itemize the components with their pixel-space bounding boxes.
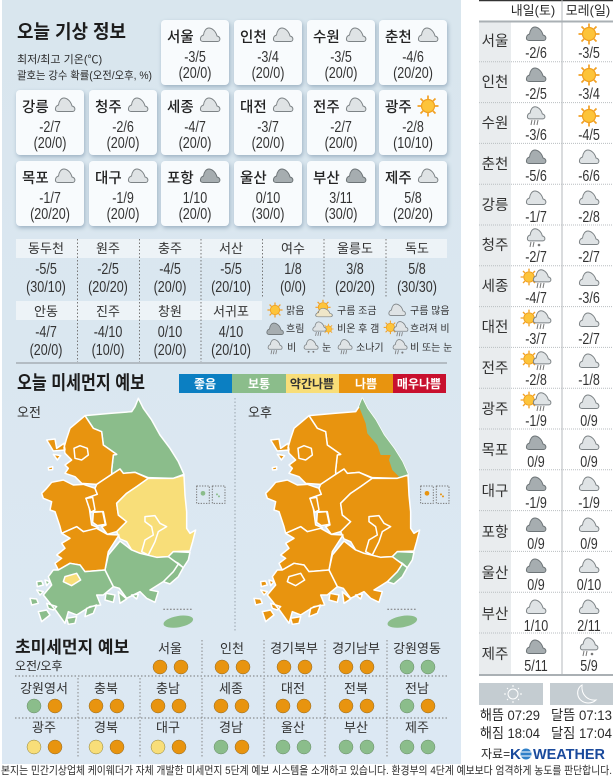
table: other cities: 진주 xyxy=(96,304,120,319)
panel: two-day forecast table: -2/8 xyxy=(525,371,547,388)
card: 대구: 대구 xyxy=(95,170,122,187)
panel: two-day forecast table: -1/9 xyxy=(525,412,547,429)
card: 전주: 전주 xyxy=(313,99,340,116)
table: other cities: 충주 xyxy=(158,241,182,256)
panel: ultrafine dust grid: 강원영서 xyxy=(20,681,68,696)
subtitle notes: 괄호는 강수 확률(오전/오후, %) xyxy=(17,69,152,82)
card: 수원: (20/0) xyxy=(325,64,357,81)
panel: ultrafine dust grid: 경기북부 xyxy=(270,641,318,656)
card: 청주: -2/6 xyxy=(112,118,134,135)
card: 포항 xyxy=(161,161,229,226)
panel: two-day forecast table: -2/7 xyxy=(525,248,547,265)
table: other cities: 동두천 xyxy=(28,241,64,256)
panel: two-day forecast table: 광주 xyxy=(482,401,508,418)
table: other cities: 4/10 xyxy=(219,323,243,340)
panel: ultrafine dust grid: 전남 xyxy=(405,681,429,696)
table: other cities: 5/8 xyxy=(408,260,426,277)
panel: two-day forecast table: -1/9 xyxy=(578,494,600,511)
panel: two-day forecast table: 전주 xyxy=(482,360,508,377)
panel: two-day forecast table: 대전 xyxy=(482,319,508,336)
card: 광주: 광주 xyxy=(385,99,412,116)
panel: two-day forecast table: -3/6 xyxy=(578,289,600,306)
table: other cities: 3/8 xyxy=(346,260,364,277)
panel: two-day forecast table: 5/9 xyxy=(580,657,598,674)
legend: weather icons: 눈 xyxy=(322,342,331,354)
background panel xyxy=(2,0,461,764)
panel: two-day forecast table: 대구 xyxy=(482,483,508,500)
panel: two-day forecast table: -4/5 xyxy=(578,126,600,143)
card: 청주: 청주 xyxy=(95,99,122,116)
panel: ultrafine dust grid: 경북 xyxy=(94,720,118,735)
legend: air quality scale: 보통 xyxy=(248,377,270,391)
table: other cities: (30/10) xyxy=(26,278,66,295)
table: other cities: (20/10) xyxy=(211,341,251,358)
heading: fine dust forecast: 오늘 미세먼지 예보 xyxy=(17,372,145,394)
panel: two-day forecast table: 0/9 xyxy=(580,535,598,552)
source logo: 자료= xyxy=(481,747,510,761)
panel: ultrafine dust grid: 서울 xyxy=(158,641,182,656)
card: 강릉: -2/7 xyxy=(39,118,61,135)
panel: ultrafine dust grid xyxy=(15,640,447,758)
panel: two-day forecast table: 2/11 xyxy=(577,617,601,634)
sunrise and moonrise times: 해짐 18:04 xyxy=(480,725,540,741)
panel: ultrafine dust grid: 대구 xyxy=(156,720,180,735)
panel: two-day forecast table: 인천 xyxy=(482,74,508,91)
card: 세종: 세종 xyxy=(167,99,194,116)
table: other cities: -4/10 xyxy=(94,323,122,340)
card: 세종: (20/0) xyxy=(179,134,211,151)
table: other cities: 안동 xyxy=(34,304,58,319)
panel: ultrafine dust grid: 충북 xyxy=(94,681,118,696)
legend: air quality scale: 좋음 xyxy=(194,377,216,391)
panel: ultrafine dust grid: 강원영동 xyxy=(393,641,441,656)
card: 강릉 xyxy=(16,90,84,155)
panel: two-day forecast table: -1/8 xyxy=(578,371,600,388)
panel: two-day forecast table: -5/6 xyxy=(525,167,547,184)
source logo: K xyxy=(510,746,521,763)
legend: weather icons: 맑음 xyxy=(286,305,304,317)
card: 제주: 제주 xyxy=(385,170,412,187)
subtitle notes xyxy=(17,53,152,82)
card: 인천: (20/0) xyxy=(252,64,284,81)
table: other cities: -5/5 xyxy=(35,260,57,277)
card: 서울 xyxy=(161,20,229,85)
legend: weather icons: 비 xyxy=(287,342,296,354)
table: other cities: -2/5 xyxy=(97,260,119,277)
sunrise and moonrise times: 해뜸 07:29 xyxy=(480,707,540,723)
card: 포항: 1/10 xyxy=(183,189,207,206)
panel: two-day forecast table: -2/5 xyxy=(525,85,547,102)
legend: weather icons: 구름 조금 xyxy=(337,305,377,317)
legend: air quality scale xyxy=(179,374,446,393)
card: 제주: (20/20) xyxy=(393,205,433,222)
table: other cities: -4/7 xyxy=(35,323,57,340)
card: 청주: (20/0) xyxy=(107,134,139,151)
panel: ultrafine dust grid: 경기남부 xyxy=(332,641,380,656)
card: 목포: -1/7 xyxy=(39,189,61,206)
table: other cities: 0/10 xyxy=(158,323,182,340)
panel: two-day forecast table: 모레(일) xyxy=(566,3,610,18)
card: 울산: 0/10 xyxy=(256,189,280,206)
panel: ultrafine dust grid: 세종 xyxy=(219,681,243,696)
table: other cities: 서산 xyxy=(219,241,243,256)
card: 부산: 부산 xyxy=(313,170,340,187)
panel: two-day forecast table: 0/9 xyxy=(527,453,545,470)
panel: ultrafine dust grid: 부산 xyxy=(344,720,368,735)
panel: two-day forecast table: -1/7 xyxy=(525,208,547,225)
subtitle: morning/afternoon: 오전/오후 xyxy=(15,659,62,673)
card: 울산 xyxy=(234,161,302,226)
table: other cities: -4/5 xyxy=(159,260,181,277)
label: morning: 오전 xyxy=(17,405,41,420)
card: 광주 xyxy=(379,90,447,155)
card: 포항: 포항 xyxy=(167,170,194,187)
panel: ultrafine dust grid: 인천 xyxy=(220,641,244,656)
heading: ultrafine dust forecast: 초미세먼지 예보 xyxy=(15,638,129,657)
table: other cities: -5/5 xyxy=(220,260,242,277)
panel: ultrafine dust grid: 광주 xyxy=(32,720,56,735)
card: 세종: -4/7 xyxy=(184,118,206,135)
card: 포항: (20/0) xyxy=(179,205,211,222)
table: other cities: (20/0) xyxy=(154,278,186,295)
card: 전주: -2/7 xyxy=(330,118,352,135)
card: 부산: 3/11 xyxy=(329,189,353,206)
card: 인천: -3/4 xyxy=(257,48,279,65)
panel: two-day forecast table: 강릉 xyxy=(482,197,508,214)
card: 인천 xyxy=(234,20,302,85)
panel: ultrafine dust grid: 전북 xyxy=(344,681,368,696)
table: other cities: (20/0) xyxy=(30,341,62,358)
panel: ultrafine dust grid: 경남 xyxy=(219,720,243,735)
table: other cities: 1/8 xyxy=(284,260,302,277)
legend: weather icons: 비 또는 눈 xyxy=(410,342,452,354)
card: 울산: 울산 xyxy=(240,170,267,187)
panel: two-day forecast table: 0/9 xyxy=(527,576,545,593)
table: other cities: (20/20) xyxy=(335,278,375,295)
panel: two-day forecast table: -3/4 xyxy=(578,85,600,102)
panel: two-day forecast table: 제주 xyxy=(482,646,508,663)
subtitle notes: 최저/최고 기온(℃) xyxy=(17,53,102,66)
table: other cities: (30/30) xyxy=(397,278,437,295)
card: 서울: -3/5 xyxy=(184,48,206,65)
panel: two-day forecast table: 0/9 xyxy=(580,453,598,470)
card: 대구 xyxy=(89,161,157,226)
card: 수원 xyxy=(307,20,375,85)
card: 울산: (30/0) xyxy=(252,205,284,222)
sunrise and moonrise times xyxy=(480,707,612,741)
panel: two-day forecast table: 울산 xyxy=(482,565,508,582)
panel: two-day forecast table: 1/10 xyxy=(524,617,548,634)
table: other cities: 서귀포 xyxy=(213,304,249,319)
table: other cities: (10/0) xyxy=(92,341,124,358)
table: other cities: 원주 xyxy=(96,241,120,256)
card: 목포 xyxy=(16,161,84,226)
panel: two-day forecast table: 춘천 xyxy=(482,156,508,173)
sunrise and moonrise times: 달뜸 07:13 xyxy=(551,707,612,723)
icon: sun box xyxy=(479,683,543,705)
map: morning xyxy=(30,398,225,630)
panel: two-day forecast table: -1/9 xyxy=(525,494,547,511)
panel: two-day forecast table: -4/7 xyxy=(525,289,547,306)
card: 서울: 서울 xyxy=(167,29,194,46)
panel: two-day forecast table: 세종 xyxy=(482,278,508,295)
panel: two-day forecast table: 수원 xyxy=(482,115,508,132)
card: 목포: 목포 xyxy=(22,171,49,187)
card: 대전: -3/7 xyxy=(257,118,279,135)
card: 제주 xyxy=(379,161,447,226)
panel: two-day forecast table: -2/7 xyxy=(578,248,600,265)
title: today's weather: 오늘 기상 정보 xyxy=(17,21,126,43)
panel: two-day forecast table: 청주 xyxy=(482,237,508,254)
panel: two-day forecast table: -3/5 xyxy=(578,44,600,61)
panel: two-day forecast table: -6/6 xyxy=(578,167,600,184)
panel: ultrafine dust grid: 충남 xyxy=(156,681,180,696)
legend: weather icons: 구름 많음 xyxy=(410,305,450,317)
card: 서울: (20/0) xyxy=(179,64,211,81)
card: 세종 xyxy=(161,90,229,155)
card: 청주 xyxy=(89,90,157,155)
table: other cities: 여수 xyxy=(281,241,305,256)
panel: two-day forecast table: 서울 xyxy=(482,33,508,50)
legend: weather icons: 흐려져 비 xyxy=(410,323,450,335)
card: 목포: (20/20) xyxy=(30,205,70,222)
panel: two-day forecast table: -2/7 xyxy=(578,330,600,347)
table: other cities: (0/0) xyxy=(280,278,306,295)
card: 수원: -3/5 xyxy=(330,48,352,65)
card: 강릉: (20/0) xyxy=(34,134,66,151)
panel: ultrafine dust grid: 울산 xyxy=(281,720,305,735)
legend: weather icons: 흐림 xyxy=(286,323,304,335)
panel: two-day forecast table: -2/8 xyxy=(578,208,600,225)
legend: weather icons: 비온 후 갬 xyxy=(337,323,379,335)
card: 전주 xyxy=(307,90,375,155)
panel: ultrafine dust grid: 제주 xyxy=(405,720,429,735)
card: 수원: 수원 xyxy=(313,29,340,46)
card: 제주: 5/8 xyxy=(404,189,422,206)
card: 부산 xyxy=(307,161,375,226)
card: 춘천: (20/20) xyxy=(393,64,433,81)
panel: city cards xyxy=(16,20,447,226)
panel: two-day forecast table: 부산 xyxy=(482,606,508,623)
panel: two-day forecast table: -3/6 xyxy=(525,126,547,143)
card: 부산: (30/0) xyxy=(325,205,357,222)
panel: two-day forecast table: 0/9 xyxy=(580,412,598,429)
card: 전주: (20/0) xyxy=(325,134,357,151)
panel: two-day forecast table: 내일(토) xyxy=(511,3,555,18)
table: other cities: 울릉도 xyxy=(337,241,373,256)
label: afternoon: 오후 xyxy=(248,405,272,420)
card: 대전 xyxy=(234,90,302,155)
card: 광주: -2/8 xyxy=(402,118,424,135)
card: 춘천: -4/6 xyxy=(402,48,424,65)
card: 대전: 대전 xyxy=(240,99,267,116)
panel: two-day forecast table: 포항 xyxy=(482,524,508,541)
panel: two-day forecast table xyxy=(479,0,613,675)
table: other cities: 창원 xyxy=(158,304,182,319)
table: other cities: (20/20) xyxy=(88,278,128,295)
source logo xyxy=(481,746,605,763)
legend: air quality scale: 나쁨 xyxy=(355,377,377,391)
panel: two-day forecast table: 0/10 xyxy=(577,576,601,593)
sunrise and moonrise times: 달짐 17:04 xyxy=(551,725,612,741)
panel: two-day forecast table: -2/6 xyxy=(525,44,547,61)
panel: two-day forecast table: 목포 xyxy=(482,443,508,459)
icon: moon box xyxy=(550,683,613,705)
card: 인천: 인천 xyxy=(240,29,267,46)
source logo: WEATHER xyxy=(533,746,605,763)
card: 대구: -1/9 xyxy=(112,189,134,206)
card: 춘천: 춘천 xyxy=(385,29,412,46)
legend: weather icons xyxy=(267,300,452,354)
card: 대구: (20/0) xyxy=(107,205,139,222)
table: other cities xyxy=(16,239,447,363)
legend: air quality scale: 매우나쁨 xyxy=(397,376,441,391)
legend: weather icons: 소나기 xyxy=(356,342,384,354)
panel: two-day forecast table: 0/9 xyxy=(527,535,545,552)
panel: ultrafine dust grid: 대전 xyxy=(281,681,305,696)
panel: two-day forecast table: -3/7 xyxy=(525,330,547,347)
card: 강릉: 강릉 xyxy=(22,99,49,116)
table: other cities: 독도 xyxy=(405,241,429,256)
card: 광주: (10/10) xyxy=(393,134,433,151)
table: other cities: (20/10) xyxy=(211,278,251,295)
table: other cities: (20/0) xyxy=(154,341,186,358)
legend: air quality scale: 약간나쁨 xyxy=(290,377,334,391)
map: afternoon xyxy=(254,398,449,630)
card: 대전: (20/0) xyxy=(252,134,284,151)
card: 춘천 xyxy=(379,20,447,85)
panel: two-day forecast table: 5/11 xyxy=(524,657,548,674)
